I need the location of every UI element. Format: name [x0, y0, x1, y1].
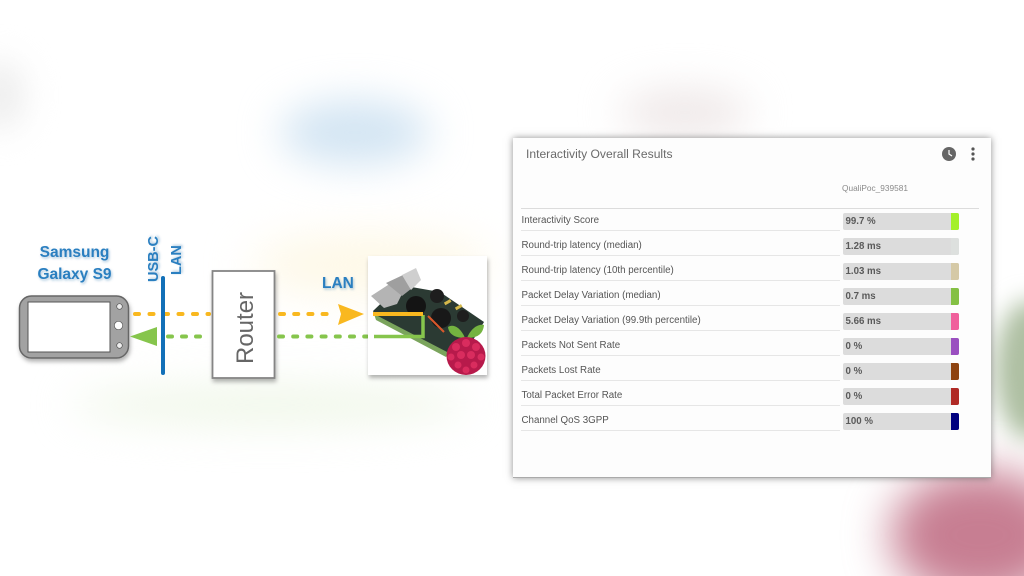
row: Interactivity Score: 99.7 % — [846, 216, 876, 227]
row: Interactivity Score — [521, 213, 959, 231]
row: Packet Delay Variation (99.9th percentile) — [521, 313, 959, 331]
row: Total Packet Error Rate: Total Packet Error Rate — [522, 390, 622, 401]
label: Samsung Galaxy S9: Galaxy S9 — [37, 266, 112, 283]
row: Packets Not Sent Rate: Packets Not Sent Rate — [522, 340, 620, 351]
arrow: green dashed link into phone — [130, 327, 200, 346]
USB-C / LAN divider — [161, 278, 165, 373]
heading: Interactivity Overall Results — [526, 147, 673, 161]
network diagram — [17, 234, 490, 384]
arrow: orange dashed link to Raspberry Pi — [280, 304, 364, 325]
router box — [212, 271, 274, 378]
label: LAN right: LAN — [322, 275, 354, 292]
row: Round-trip latency (10th percentile) — [521, 263, 959, 281]
icon: clock — [942, 147, 956, 161]
row: Packet Delay Variation (median): 0.7 ms — [846, 291, 876, 302]
label: USB-C: USB-C — [146, 236, 162, 282]
row: Packets Not Sent Rate — [521, 338, 959, 356]
label: LAN left: LAN — [169, 245, 185, 275]
row: Packets Lost Rate: Packets Lost Rate — [522, 365, 601, 376]
row: Round-trip latency (10th percentile): 1.03 ms — [846, 266, 881, 277]
header rule — [521, 208, 979, 209]
icon: menu dots — [971, 147, 975, 161]
row: Round-trip latency (median): Round-trip latency (median) — [522, 240, 642, 251]
row: Total Packet Error Rate: 0 % — [846, 391, 862, 402]
row: Channel QoS 3GPP: Channel QoS 3GPP — [522, 415, 609, 426]
row: Packet Delay Variation (median): Packet Delay Variation (median) — [522, 290, 661, 301]
column header: QualiPoc_939581 — [842, 183, 908, 193]
row: Packet Delay Variation (99.9th percentile): Packet Delay Variation (99.9th percentile) — [522, 315, 701, 326]
router box: Router — [232, 292, 259, 364]
row: Packet Delay Variation (median) — [521, 288, 959, 306]
row: Packet Delay Variation (99.9th percentile): 5.66 ms — [846, 316, 881, 327]
row: Interactivity Score: Interactivity Score — [522, 215, 599, 226]
icon: phone — [20, 296, 128, 358]
row: Round-trip latency (10th percentile): Round-trip latency (10th percentile) — [522, 265, 674, 276]
label: Samsung Galaxy S9: Samsung — [40, 244, 109, 261]
row: Round-trip latency (median) — [521, 238, 959, 256]
row: Total Packet Error Rate — [521, 388, 959, 406]
arrow: green dashed link from Raspberry Pi — [279, 334, 367, 338]
row: Channel QoS 3GPP — [521, 413, 959, 431]
row: Packets Lost Rate — [521, 363, 959, 381]
label: Samsung Galaxy S9 — [37, 244, 112, 283]
raspberry logo — [448, 326, 465, 338]
row: Packets Lost Rate: 0 % — [846, 366, 862, 377]
Raspberry Pi picture — [368, 256, 487, 375]
board — [373, 285, 484, 356]
row: Packets Not Sent Rate: 0 % — [846, 341, 862, 352]
arrow: orange dashed link to phone side — [135, 312, 209, 316]
row: Channel QoS 3GPP: 100 % — [846, 416, 873, 427]
row: Round-trip latency (median): 1.28 ms — [846, 241, 881, 252]
orange / green routes — [374, 315, 423, 336]
panel: Interactivity Overall Results — [513, 138, 991, 478]
